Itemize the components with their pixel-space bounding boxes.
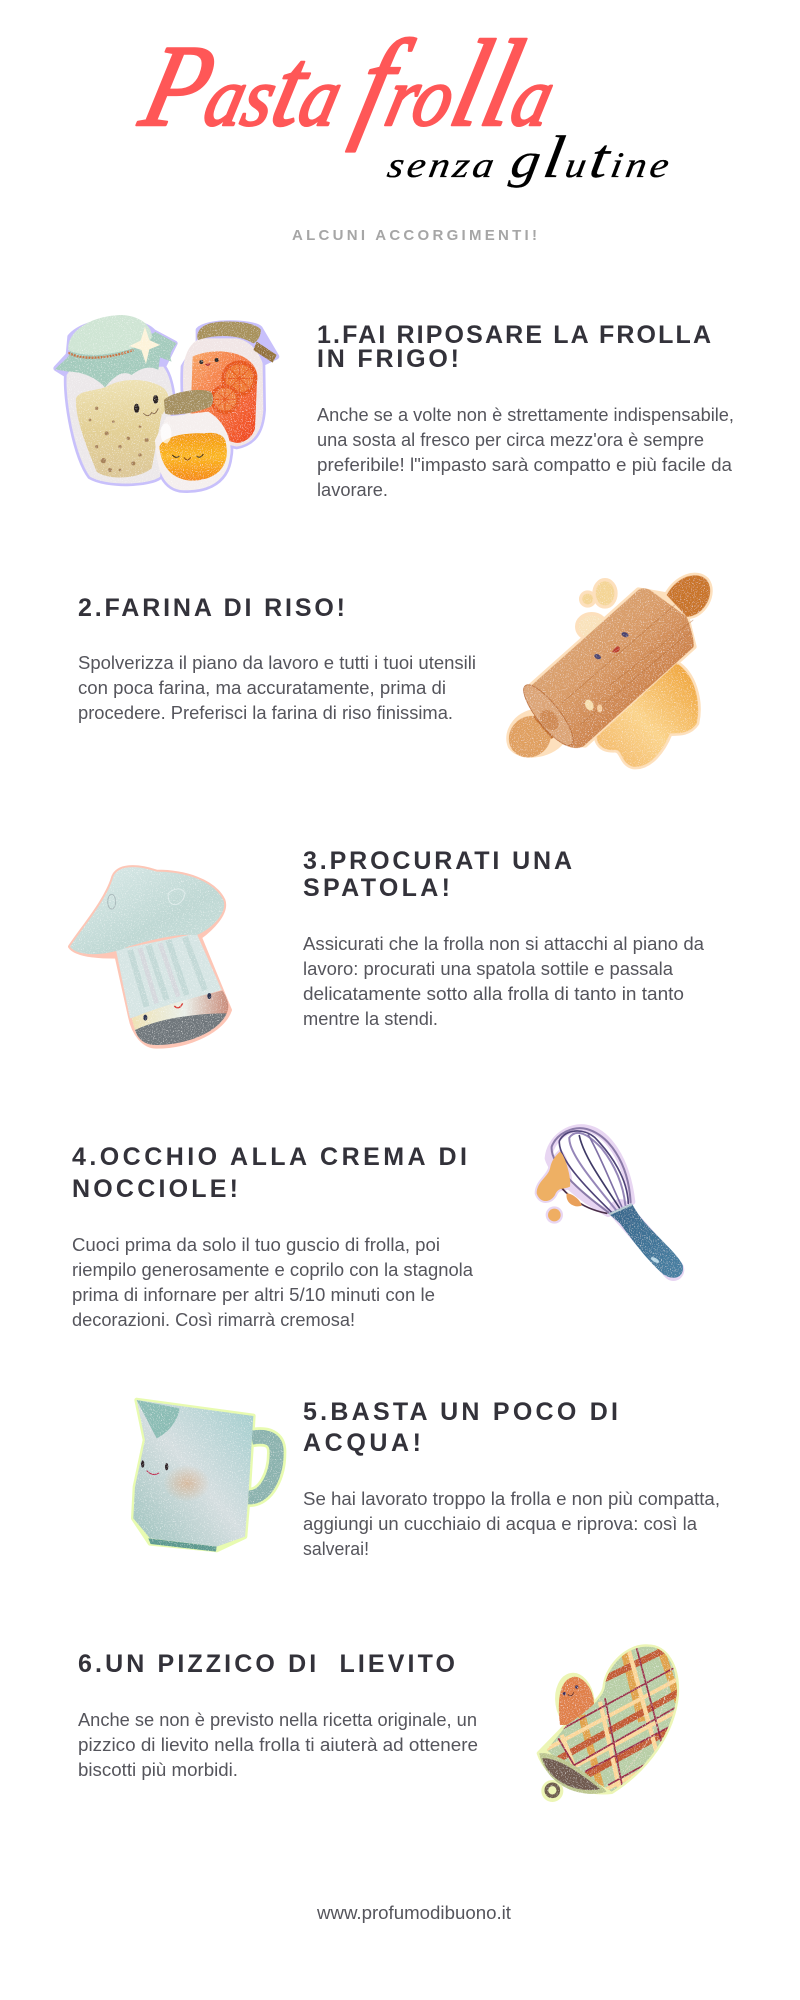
body text: Cuoci prima da solo il tuo guscio di frolla, poi: [72, 1235, 440, 1255]
heading: 5.BASTA UN POCO DI: [303, 1398, 618, 1426]
icon: chef hat: [70, 867, 230, 1047]
heading: [317, 321, 711, 373]
icon: rolling pin: [500, 575, 710, 767]
body text: [303, 1489, 720, 1559]
title: Pasta frolla: [129, 16, 572, 153]
panel: tip 2: [78, 575, 710, 767]
body text: riempilo generosamente e coprilo con la stagnola: [72, 1260, 474, 1280]
heading: SPATOLA!: [303, 874, 450, 902]
heading: [303, 847, 572, 902]
body text: Spolverizza il piano da lavoro e tutti i tuoi utensili: [78, 653, 476, 673]
body text: procedere. Preferisci la farina di riso finissima.: [78, 703, 453, 723]
body text: [78, 653, 476, 723]
body text: pizzico di lievito nella frolla ti aiuterà ad ottenere: [78, 1735, 478, 1755]
icon: jug: [133, 1400, 277, 1552]
heading: [303, 1398, 618, 1457]
body text: decorazioni. Così rimarrà cremosa!: [72, 1310, 355, 1330]
body text: Anche se non è previsto nella ricetta originale, un: [78, 1710, 477, 1730]
heading: ACQUA!: [303, 1429, 421, 1457]
subtitle script: senza glutine: [384, 124, 679, 191]
heading: 4.OCCHIO ALLA CREMA DI: [72, 1143, 467, 1171]
panel: tip 5: [133, 1398, 720, 1559]
body text: biscotti più morbidi.: [78, 1760, 238, 1780]
footer website: www.profumodibuono.it: [316, 1903, 511, 1923]
heading: 6.UN PIZZICO DI LIEVITO: [78, 1650, 455, 1678]
body text: preferibile! l"impasto sarà compatto e più facile da: [317, 455, 733, 475]
heading: IN FRIGO!: [317, 345, 459, 373]
body text: Se hai lavorato troppo la frolla e non più compatta,: [303, 1489, 720, 1509]
panel: tip 3: [70, 847, 705, 1047]
panel: tip 6: [78, 1642, 692, 1800]
body text: prima di infornare per altri 5/10 minuti con le: [72, 1285, 435, 1305]
icon: whisk: [537, 1128, 683, 1278]
body text: lavoro: procurati una spatola sottile e passala: [303, 959, 674, 979]
tagline: ALCUNI ACCORGIMENTI!: [292, 227, 537, 244]
heading: 1.FAI RIPOSARE LA FROLLA: [317, 321, 711, 349]
icon: jars: [55, 315, 277, 490]
body text: [78, 1710, 478, 1780]
body text: mentre la stendi.: [303, 1009, 438, 1029]
heading: 2.FARINA DI RISO!: [78, 594, 345, 622]
body text: Assicurati che la frolla non si attacchi al piano da: [303, 934, 705, 954]
body text: [303, 934, 705, 1029]
body text: delicatamente sotto alla frolla di tanto in tanto: [303, 984, 684, 1004]
body text: aggiungi un cucchiaio di acqua e riprova: così la: [303, 1514, 698, 1534]
panel: tip 4: [72, 1128, 683, 1330]
body text: salverai!: [303, 1539, 369, 1559]
body text: una sosta al fresco per circa mezz'ora è sempre: [317, 430, 704, 450]
heading: [72, 1143, 467, 1203]
body text: con poca farina, ma accuratamente, prima di: [78, 678, 446, 698]
body text: Anche se a volte non è strettamente indispensabile,: [317, 405, 734, 425]
body text: [317, 405, 734, 500]
body text: lavorare.: [317, 480, 388, 500]
body text: [72, 1235, 474, 1330]
panel: tip 1: [55, 315, 734, 500]
heading: NOCCIOLE!: [72, 1175, 238, 1203]
icon: oven mitt: [539, 1642, 692, 1800]
heading: 3.PROCURATI UNA: [303, 847, 572, 875]
